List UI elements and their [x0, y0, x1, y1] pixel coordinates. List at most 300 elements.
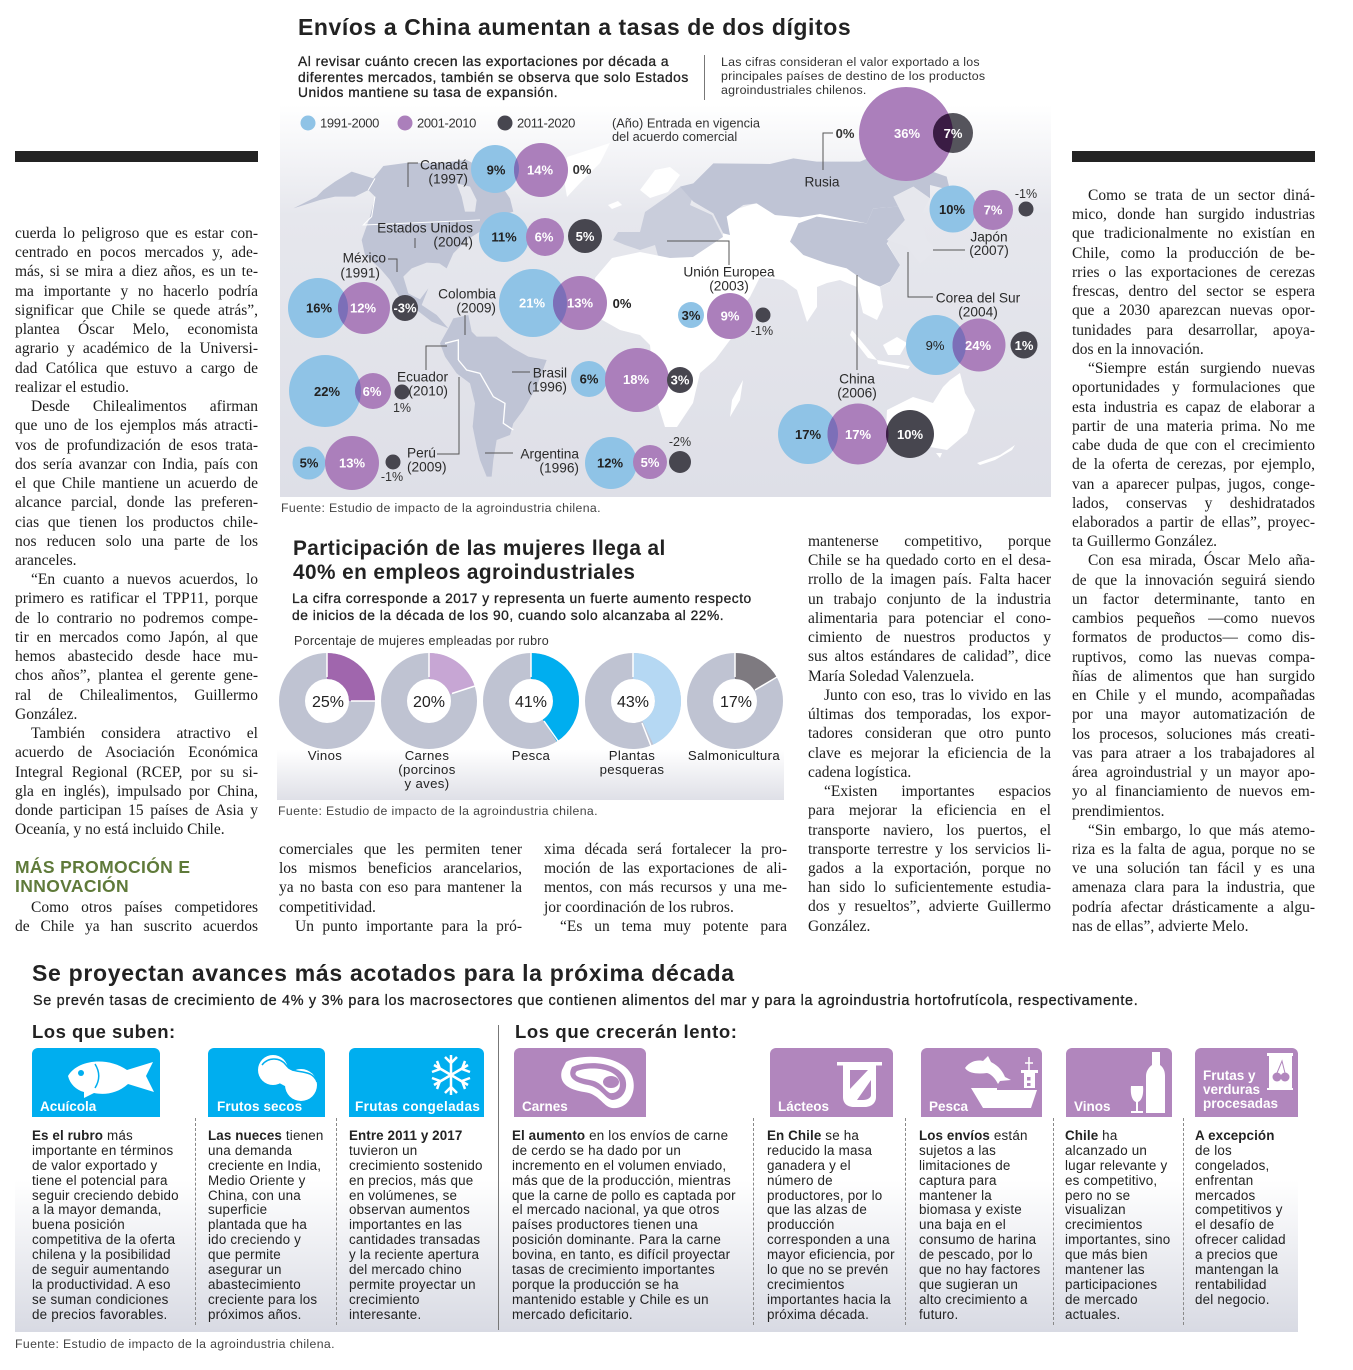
text: Frutas congeladas: crecimiento	[349, 1292, 420, 1307]
article column 1: Desde Chilealimentos afirman	[31, 398, 258, 415]
legend	[300, 116, 761, 144]
text: Frutos secos: próximos años.	[208, 1306, 302, 1322]
article column 5: de que la innovación seguirá siendo	[1072, 572, 1315, 589]
bubbles: Ecuador: 1%	[393, 401, 411, 415]
article column 5: ruptivos, como las nuevas compa-	[1072, 649, 1315, 666]
land: Greenland and Iceland	[563, 143, 622, 209]
land: Africa, Middle East, Asia	[595, 203, 905, 427]
bubbles: Canadá	[471, 143, 592, 197]
legend: 2001-2010	[417, 116, 476, 130]
donut labels: pesqueras	[600, 762, 664, 777]
icon: fish and ship	[965, 1056, 1038, 1108]
heading: los que crecerán lento: Los que crecerán lento:	[515, 1021, 738, 1042]
intro text: Unidos mantiene su tasa de expansión.	[298, 85, 558, 100]
country labels: (2004)	[433, 234, 473, 250]
article column 5: formatos de productos— como dis-	[1072, 629, 1315, 646]
article column 5: ve una solución tan fácil y es una	[1072, 860, 1315, 877]
article column 1: dad Católica que estuvo a cargo de	[15, 360, 258, 377]
bubbles: China	[778, 404, 934, 464]
text: Pesca: sujetos a las	[919, 1143, 996, 1158]
donut: Pesca: 41%	[515, 694, 547, 711]
bubbles: Japón: -1%	[1015, 187, 1037, 201]
text: Vinos: actuales.	[1065, 1306, 1120, 1322]
bubbles: Perú: 13%	[339, 456, 365, 470]
icon: steak	[561, 1056, 634, 1108]
donut heading: Porcentaje de mujeres empleadas por rubro	[294, 634, 549, 648]
text: Pesca: de pescado, por lo	[919, 1247, 1033, 1262]
card: Pesca: Pesca	[929, 1099, 968, 1114]
text: Pesca: futuro.	[919, 1306, 958, 1322]
card: Frutas y verduras procesadas: procesadas	[1203, 1096, 1278, 1111]
left black rule	[15, 151, 258, 162]
country labels: Rusia	[804, 174, 840, 190]
article column 4: últimas dos temporadas, los expor-	[808, 706, 1051, 723]
text: Carnes: mantenido estable y Chile es un	[512, 1292, 709, 1307]
article column 5: lados, conservas y deshidratados	[1072, 495, 1315, 512]
article column 5: mico, donde han surgido industrias	[1072, 206, 1315, 223]
text: Lácteos: crecimientos	[767, 1277, 845, 1292]
country labels: (2009)	[456, 300, 496, 316]
article column 4: clave es mejorar la eficiencia de la	[808, 745, 1051, 762]
article column 4: Chile se ha quedado corto en el desa-	[808, 552, 1051, 569]
title: envíos a China: Envíos a China aumentan a tasas de dos dígitos	[298, 14, 851, 40]
bubbles: Brasil: 3%	[671, 372, 690, 388]
card: Frutas congeladas: Frutas congeladas	[355, 1099, 480, 1114]
text: Acuícola	[32, 1128, 179, 1322]
note text	[721, 55, 985, 97]
heading: los que suben: Los que suben:	[32, 1021, 176, 1042]
legend: 2011-2020	[517, 116, 575, 130]
note text: principales países de destino de los productos	[721, 69, 985, 83]
text: Carnes	[512, 1128, 736, 1322]
article column 5: “Sin embargo, lo que más atemo-	[1088, 822, 1315, 839]
donut: Plantas pesqueras: 43%	[617, 694, 649, 711]
bubbles: China: 10%	[897, 427, 923, 442]
text: Frutas y verduras: mantengan la	[1195, 1262, 1279, 1277]
article column 2: ya no basta con eso para mantener la	[279, 879, 522, 896]
country labels: (2009)	[407, 460, 447, 474]
text: Lácteos	[767, 1128, 895, 1322]
bubbles: Canadá: 0%	[573, 162, 592, 177]
donut: Salmonicultura	[700, 653, 777, 736]
bubbles: Ecuador: 22%	[314, 384, 340, 399]
note text: Las cifras consideran el valor exportado a los	[721, 55, 980, 69]
article column 5: ñías de alimentos que han surgido	[1072, 668, 1315, 685]
article column 1: significar que Chile se quede atrás”,	[15, 302, 258, 319]
country labels: Brasil	[533, 366, 567, 380]
donut labels: Pesca	[512, 748, 550, 763]
text: Frutos secos: una demanda	[208, 1143, 292, 1158]
bubbles: Unión Europea: 9%	[721, 308, 740, 324]
text: Pesca: consumo de harina	[919, 1232, 1036, 1247]
country labels	[340, 158, 1021, 476]
bubbles: Perú	[292, 436, 403, 490]
bubbles: Argentina	[585, 435, 691, 489]
text: Frutos secos: asegurar un	[208, 1262, 282, 1277]
article column 1: aranceles.	[15, 552, 77, 569]
text: Vinos: crecimientos	[1065, 1217, 1143, 1232]
article column 1: que uno de los ejemplos más atracti-	[15, 417, 258, 434]
subtitle: próxima década: Se prevén tasas de crecimiento de 4% y 3% para los macrosectores que contienen alimentos del mar y para la agroindustria hortofrutícola, respectivamente.	[33, 993, 1138, 1009]
country labels: (1996)	[527, 380, 567, 394]
country labels: Corea del Sur	[936, 290, 1021, 306]
article column 5: frescas, dentro del sector se espera	[1072, 283, 1315, 300]
article column 5: riza es la falta de agua, porque no se	[1072, 841, 1315, 858]
bubbles: Brasil: 6%	[580, 372, 599, 386]
article column 4: cadena logística.	[808, 764, 911, 781]
country labels: México	[343, 250, 386, 266]
card: Acuícola: Acuícola	[40, 1099, 96, 1114]
text: Frutas y verduras: del negocio.	[1195, 1292, 1270, 1307]
bubbles: Canadá: 9%	[487, 162, 506, 178]
donut: Vinos	[292, 653, 375, 736]
text: Frutas congeladas: y la reciente apertura	[349, 1247, 479, 1262]
text: Pesca	[919, 1128, 1040, 1322]
article column 4: Junto con eso, tras lo vivido en las	[824, 687, 1051, 704]
leader lines	[388, 133, 965, 454]
bubbles: Colombia: 21%	[519, 296, 545, 310]
donut: Plantas pesqueras	[598, 653, 668, 746]
text: Lácteos: número de	[767, 1173, 833, 1188]
article column 5: un factor determinante, tanto en	[1072, 591, 1315, 608]
icon: can with cherries	[1267, 1053, 1293, 1090]
card: Lácteos: Lácteos	[778, 1099, 829, 1114]
text: Vinos: mantener las	[1065, 1262, 1145, 1277]
article column 1 continuation	[15, 899, 258, 935]
bubbles: Japón	[930, 186, 1037, 232]
card: Frutos secos: Frutos secos	[217, 1099, 302, 1114]
source note map: Fuente: Estudio de impacto de la agroindustria chilena.	[281, 501, 601, 515]
article column 5: esta industria es capaz de elaborar a	[1072, 399, 1315, 416]
bubbles: Estados Unidos: 6%	[535, 230, 554, 244]
text: Frutos secos: creciente para los	[208, 1292, 317, 1307]
article column 4: dos y resueltos”, advierte Guillermo	[808, 898, 1051, 915]
title: mujeres	[293, 537, 666, 584]
article column 1: donde participan 15 países de Asia y	[15, 802, 258, 819]
article column 1: dos sería avanzar con India, país con	[15, 456, 258, 473]
article column 2: los mismos beneficios arancelarios,	[279, 860, 522, 877]
article column 4: María Soledad Valenzuela.	[808, 668, 974, 685]
bubbles: China: 17%	[795, 427, 821, 442]
bubbles: Rusia: 36%	[894, 126, 920, 141]
text: Vinos: participaciones	[1065, 1277, 1157, 1292]
text: Frutos secos: ido creciendo y	[208, 1232, 301, 1247]
card: Vinos: Vinos	[1074, 1099, 1111, 1114]
text: Lácteos: corresponden a una	[767, 1232, 890, 1247]
text: Frutas congeladas: en precios, más que	[349, 1173, 473, 1188]
text: Frutas congeladas: importantes en las	[349, 1217, 462, 1232]
text: Frutas y verduras: ofrecer calidad	[1195, 1232, 1286, 1247]
card: Frutas y verduras procesadas	[1195, 1048, 1298, 1117]
bubbles: Corea del Sur	[906, 315, 1038, 375]
article column 5: Como se trata de un sector diná-	[1088, 187, 1315, 204]
article column 4: sus altos estándares de calidad”, dice	[808, 648, 1051, 665]
article column 4: cimiento de nuestros productos y	[808, 629, 1051, 646]
article column 4: “Existen importantes espacios	[824, 783, 1051, 800]
article column 1: agrario y académico de la Universi-	[15, 340, 258, 357]
article column 2	[279, 841, 522, 935]
bubbles: Colombia: 13%	[567, 296, 593, 310]
card: Frutos secos	[208, 1048, 325, 1117]
article column 5: prendimientos.	[1072, 802, 1165, 820]
text: Lácteos: próxima década.	[767, 1306, 869, 1322]
article column 1	[15, 225, 258, 838]
card: Vinos	[1066, 1048, 1172, 1117]
country labels: (2003)	[709, 278, 749, 294]
article column 5: “Siempre están surgiendo nuevas	[1088, 360, 1315, 377]
card: Carnes: Carnes	[522, 1099, 568, 1114]
bubbles: Brasil	[571, 348, 693, 412]
country labels: Japón	[970, 230, 1008, 244]
article column 1: ral de Chilealimentos, Guillermo	[15, 687, 258, 704]
article column 1: “En cuanto a nuevos acuerdos, lo	[31, 571, 258, 588]
subtitle: mujeres	[292, 591, 752, 623]
text: Frutos secos: abastecimiento	[208, 1277, 301, 1292]
card: Carnes	[514, 1048, 646, 1117]
note text: agroindustriales chilenos.	[721, 83, 867, 97]
country labels: Unión Europea	[683, 264, 775, 280]
article column 5: ta Guillermo González.	[1072, 533, 1217, 550]
article column 1: chos años”, plantea el gerente gene-	[15, 667, 258, 684]
bubbles: Rusia: 0%	[836, 126, 855, 141]
bubbles: Estados Unidos: 5%	[576, 229, 595, 244]
donut: Carnes	[394, 653, 475, 736]
text: Vinos: alcanzado un	[1065, 1143, 1147, 1158]
donut: Salmonicultura: 17%	[720, 694, 752, 711]
article column 5: dos en la innovación.	[1072, 341, 1204, 358]
bubbles: Japón: 10%	[939, 202, 965, 217]
article column 5: partir de una materia prima. No me	[1072, 418, 1315, 435]
text: Vinos: que más bien	[1065, 1247, 1148, 1262]
icon: bottle and glass	[1130, 1052, 1165, 1113]
text: Frutas y verduras: de los	[1195, 1143, 1232, 1158]
article column 1: cuerda lo peligroso que es estar con-	[15, 225, 258, 242]
land: islands, Madagascar, Australia	[730, 330, 1015, 465]
article column 4: mantenerse competitivo, porque	[808, 533, 1051, 550]
text: Acuícola: competitiva de la oferta	[32, 1232, 175, 1247]
text: Frutas y verduras: el desafío de	[1195, 1217, 1274, 1232]
text: Pesca: limitaciones de	[919, 1158, 1011, 1173]
text: Acuícola: de valor exportado y	[32, 1158, 157, 1173]
text: Lácteos: lo que no se prevén	[767, 1262, 888, 1277]
land: North America	[293, 160, 513, 328]
article column 5: de la oferta de cerezas, por ejemplo,	[1072, 456, 1315, 473]
text: Frutas congeladas	[349, 1128, 483, 1322]
heading: más promoción: MÁS PROMOCIÓN E	[15, 857, 190, 877]
country labels: Estados Unidos	[377, 220, 473, 236]
bubbles: México: -3%	[393, 300, 417, 316]
text: Pesca: que no hay factores	[919, 1262, 1040, 1277]
article column 3: “Es un tema muy potente para	[560, 918, 787, 935]
text: Lácteos: que las alzas de	[767, 1202, 867, 1217]
text: Frutos secos: plantada que ha	[208, 1217, 307, 1232]
country labels: (2004)	[958, 304, 998, 320]
text: Frutas y verduras: mercados	[1195, 1188, 1255, 1202]
subtitle: mujeres: de inicios de la década de los 90, cuando solo alcanzaba al 22%.	[292, 608, 724, 623]
text: Carnes: que la carne de pollo es captada por	[512, 1188, 736, 1202]
article column 2: Un punto importante para la pró-	[295, 918, 522, 935]
text: Vinos: pero no se	[1065, 1188, 1130, 1202]
text: Frutos secos: creciente en India,	[208, 1158, 321, 1173]
text: Pesca: mantener la	[919, 1188, 992, 1202]
text: Pesca: Los envíos están	[919, 1128, 1028, 1143]
country labels: (2006)	[837, 386, 877, 400]
icon: fish	[68, 1062, 154, 1098]
heading: más promoción	[15, 857, 190, 896]
text: Lácteos: ganadera y el	[767, 1158, 851, 1173]
article column 5: amenaza clara para la industria, que	[1072, 879, 1315, 896]
card: Frutas congeladas	[349, 1048, 484, 1117]
text: Frutas congeladas: cantidades transadas	[349, 1232, 480, 1247]
article column 5: vas para atraer a los trabajadores al	[1072, 745, 1315, 762]
bubbles: Argentina: 5%	[641, 455, 660, 470]
article column 1: de lo contrario no podremos compe-	[15, 610, 258, 627]
text: Frutas y verduras: enfrentan	[1195, 1173, 1253, 1188]
text: Frutas y verduras	[1195, 1128, 1286, 1307]
text: Frutas y verduras: rentabilidad	[1195, 1277, 1267, 1292]
intro text: Al revisar cuánto crecen las exportaciones por década a	[298, 54, 669, 69]
article column 3: moción de las exportaciones de ali-	[544, 860, 787, 877]
article column 1 continuation: de Chile ya han suscrito acuerdos	[15, 918, 258, 935]
article column 5: podría afectar drásticamente a algu-	[1072, 899, 1315, 916]
donut labels: Carnes	[405, 748, 449, 763]
text: Pesca: alto crecimiento a	[919, 1292, 1028, 1307]
country labels: (1991)	[340, 266, 380, 280]
bubbles: Colombia: 0%	[613, 296, 632, 311]
land: South America	[440, 315, 547, 477]
bubbles: Rusia	[836, 87, 973, 181]
title: mujeres: 40% en empleos agroindustriales	[293, 561, 635, 584]
text: Acuícola: de precios favorables.	[32, 1306, 167, 1322]
bubbles: Estados Unidos: 11%	[491, 230, 517, 244]
bubbles: Ecuador	[289, 355, 411, 427]
article column 1: gla en inglés), impulsado por China,	[15, 783, 258, 800]
article column 5: cambios pequeños —como nuevos	[1072, 610, 1315, 627]
land: Europe	[613, 187, 723, 263]
article column 1: nos reducen solo una parte de los	[15, 533, 258, 550]
text: Frutos secos: superficie	[208, 1202, 267, 1217]
country labels: (1996)	[539, 460, 579, 476]
bubbles: Unión Europea	[678, 293, 773, 339]
article column 1: González.	[15, 706, 77, 723]
article column 1: Oceanía, y no está incluido Chile.	[15, 821, 225, 838]
text: Vinos: importantes, sino	[1065, 1232, 1170, 1247]
article column 4: gados a la exportación, porque no	[808, 860, 1051, 877]
text: Carnes: incremento en el volumen enviado,	[512, 1158, 726, 1173]
article column 4: González.	[808, 918, 870, 935]
country labels: China	[839, 372, 875, 386]
article column 1: También considera atractivo el	[31, 725, 258, 742]
country labels: (2007)	[969, 243, 1009, 258]
article column 5: que a 2030 aparezcan nuevas opor-	[1072, 302, 1315, 319]
text: Frutas congeladas: observan aumentos	[349, 1202, 470, 1217]
source note bottom: Fuente: Estudio de impacto de la agroindustria chilena.	[15, 1337, 335, 1351]
land: Russia and China	[680, 153, 950, 287]
heading: más promoción: INNOVACIÓN	[15, 876, 129, 896]
text: Pesca: biomasa y existe	[919, 1202, 1022, 1217]
article column 1: acuerdo de Asociación Económica	[15, 744, 258, 761]
article column 1: el que Chile mantiene un acuerdo de	[15, 475, 258, 492]
bubbles: Estados Unidos	[479, 212, 602, 262]
article column 5: nas de ellas”, advierte Melo.	[1072, 918, 1248, 935]
article column 5: por una mayor automatización de	[1072, 706, 1315, 723]
article column 5	[1072, 187, 1315, 935]
world map with bubbles	[280, 87, 1051, 497]
bubbles: México: 12%	[350, 300, 376, 316]
text: Lácteos: En Chile se ha	[767, 1128, 859, 1143]
bubbles: Argentina: 12%	[597, 456, 623, 470]
article column 4: un trabajo conjunto de la industria	[808, 591, 1051, 608]
text: Pesca: captura para	[919, 1173, 997, 1188]
article column 3: mentos, con más recursos y una me-	[544, 879, 787, 896]
text: Carnes: el mercado nacional, ya que otros	[512, 1202, 720, 1217]
text: Frutas y verduras: congelados,	[1195, 1158, 1269, 1173]
bubbles: México: 16%	[306, 300, 332, 316]
article column 5: Con esa mirada, Óscar Melo aña-	[1088, 552, 1315, 569]
text: Carnes: El aumento en los envíos de carne	[512, 1128, 728, 1143]
article column 5: tunidades para desarrollar, apoya-	[1072, 322, 1315, 339]
country labels: Canadá	[420, 158, 468, 172]
bubbles: México	[288, 278, 418, 338]
article column 4: transporte terrestre y los servicios li-	[808, 841, 1051, 858]
source note donuts: Fuente: Estudio de impacto de la agroindustria chilena.	[278, 804, 598, 818]
article column 5: oportunidades y formulaciones que	[1072, 379, 1315, 396]
article column 1: hemos abastecido desde hace mu-	[15, 648, 258, 665]
bubbles: Japón: 7%	[984, 202, 1003, 218]
bubbles: Argentina: -2%	[669, 435, 691, 449]
text: Lácteos: producción	[767, 1217, 835, 1232]
article column 1: vos de profundización de esos trata-	[15, 437, 258, 454]
donut labels: y aves)	[405, 776, 449, 791]
card: Acuícola	[32, 1048, 160, 1117]
text: Carnes: porque la producción se ha	[512, 1277, 679, 1292]
text: Carnes: países productores tienen una	[512, 1217, 698, 1232]
text: Frutas congeladas: tuvieron un	[349, 1143, 417, 1158]
article column 4: tadores consideran que otro punto	[808, 725, 1051, 742]
article column 1 continuation: Como otros países competidores	[31, 899, 258, 916]
donut labels: (porcinos	[398, 762, 456, 777]
text: Lácteos: productores, por lo	[767, 1188, 882, 1202]
article column 1: ma importante y no hacerlo podría	[15, 283, 258, 300]
article column 1: realizar el estudio.	[15, 379, 129, 396]
article column 2: comerciales que les permiten tener	[279, 841, 522, 858]
donut charts	[279, 653, 783, 749]
text: Lácteos: mayor eficiencia, por	[767, 1247, 895, 1262]
article column 5: los procesos, soluciones más creati-	[1072, 726, 1315, 743]
intro text: diferentes mercados, también se observa que solo Estados	[298, 70, 689, 85]
text: Lácteos: reducido la masa	[767, 1143, 872, 1158]
text: Carnes: tasas de crecimiento importantes	[512, 1262, 715, 1277]
country labels: (1997)	[428, 172, 468, 186]
text: Vinos: de mercado	[1065, 1292, 1138, 1307]
card: Frutas y verduras procesadas: Frutas y	[1203, 1068, 1256, 1083]
bubbles: Perú: 5%	[300, 456, 319, 470]
text: Acuícola: importante en términos	[32, 1143, 173, 1158]
text: Frutos secos	[208, 1128, 324, 1322]
bubbles: Corea del Sur: 24%	[965, 338, 991, 353]
article column 4: transporte naviero, los puertos, el	[808, 822, 1051, 839]
text: Acuícola: la productividad. A eso	[32, 1277, 171, 1292]
text: Acuícola: tiene el potencial para	[32, 1173, 168, 1188]
country labels: Argentina	[520, 446, 579, 462]
map background	[280, 105, 1051, 497]
text: Pesca: que sugieran un	[919, 1277, 1018, 1292]
text: Acuícola: Es el rubro más	[32, 1128, 133, 1143]
bubbles: Ecuador: 6%	[363, 384, 382, 399]
bubbles: Colombia	[499, 269, 632, 337]
article column 1: alcance parcial, donde las preferen-	[15, 494, 258, 511]
icon: cup	[837, 1062, 882, 1107]
